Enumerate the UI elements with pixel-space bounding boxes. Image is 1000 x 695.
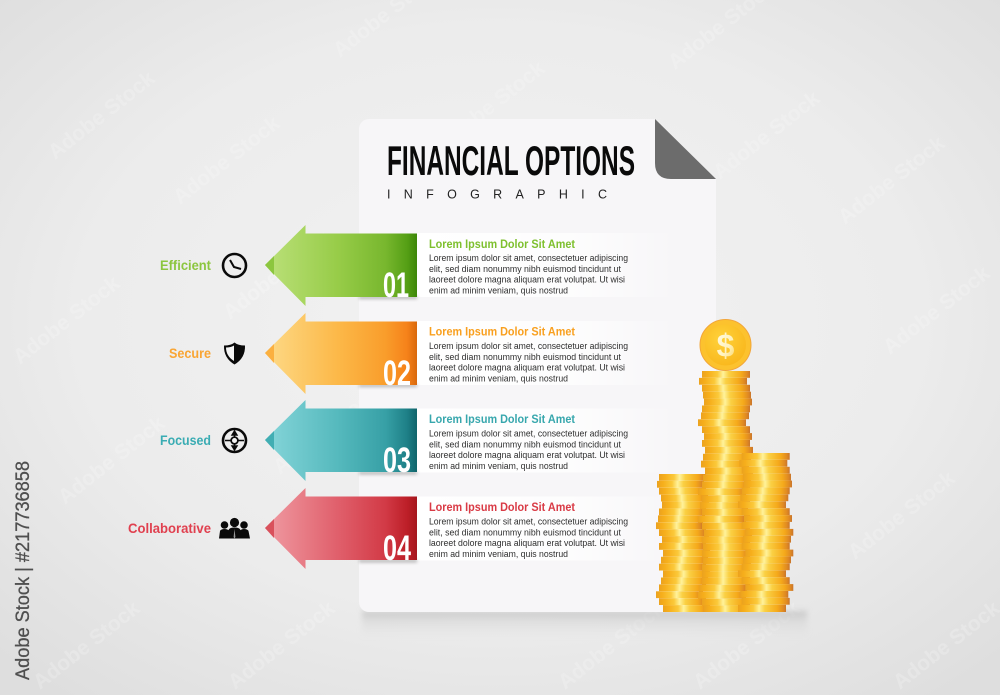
right coin stack <box>738 453 793 612</box>
body text: elit, sed diam nonummy nibh euismod tincidunt ut <box>429 440 621 450</box>
body text: enim ad minim veniam, quis nostrud <box>429 374 568 384</box>
arrow shadow <box>359 560 417 562</box>
watermark pattern: Adobe Stock <box>29 597 144 694</box>
heading: Lorem Ipsum Dolor Sit Amet <box>429 237 575 251</box>
watermark pattern: Adobe Stock <box>834 132 949 229</box>
body text: Lorem ipsum dolor sit amet, consectetuer adipiscing <box>429 428 628 440</box>
arrow <box>265 488 417 569</box>
arrow tip <box>265 519 274 538</box>
number: 02 <box>383 354 411 393</box>
watermark pattern: Adobe Stock <box>169 112 284 209</box>
label: Secure <box>169 346 211 361</box>
body text: laoreet dolore magna aliquam erat volutpat. Ut wisi <box>429 538 625 549</box>
arrow <box>265 400 417 481</box>
row 4: collaborative <box>128 488 677 569</box>
watermark pattern: Adobe Stock <box>434 57 549 154</box>
watermark pattern: Adobe Stock <box>54 412 169 509</box>
middle coin stack <box>698 371 753 612</box>
text band <box>417 408 677 472</box>
body text <box>429 428 628 472</box>
label: Focused <box>160 433 211 448</box>
subtitle: INFOGRAPHIC <box>387 188 607 202</box>
title: FINANCIAL OPTIONS <box>387 137 635 184</box>
body text <box>429 516 628 560</box>
icon: compass <box>223 429 246 452</box>
heading: Lorem Ipsum Dolor Sit Amet <box>429 500 575 514</box>
row 2: secure <box>169 313 677 394</box>
watermark pattern: Adobe Stock <box>709 87 824 184</box>
icon: shield <box>224 342 245 364</box>
text band <box>417 233 677 297</box>
arrow tip <box>265 431 274 450</box>
body text: elit, sed diam nonummy nibh euismod tincidunt ut <box>429 264 621 275</box>
number: 03 <box>383 441 411 480</box>
watermark pattern: Adobe Stock <box>844 467 959 564</box>
body text: Lorem ipsum dolor sit amet, consectetuer adipiscing <box>429 341 628 352</box>
arrow tip <box>265 256 274 275</box>
row 3: focused <box>160 400 677 481</box>
stock id side text: Adobe Stock | #217736858 <box>13 461 34 680</box>
icon: people <box>219 518 250 538</box>
left coin stack <box>656 474 710 612</box>
watermark pattern: Adobe Stock <box>879 262 994 359</box>
watermark pattern: Adobe Stock <box>224 597 339 694</box>
arrow tip <box>265 344 274 363</box>
body text: Lorem ipsum dolor sit amet, consectetuer adipiscing <box>429 516 628 528</box>
arrow <box>265 313 417 394</box>
label: Collaborative <box>128 521 211 536</box>
body text: laoreet dolore magna aliquam erat volutpat. Ut wisi <box>429 450 625 461</box>
arrow <box>265 225 417 306</box>
body text <box>429 253 628 296</box>
watermark pattern: Adobe Stock <box>269 382 384 479</box>
body text: Lorem ipsum dolor sit amet, consectetuer adipiscing <box>429 253 628 264</box>
watermark pattern: Adobe Stock <box>44 67 159 164</box>
icon: dollar coin: $ <box>717 328 735 364</box>
icon: folded corner <box>655 119 716 179</box>
number: 01 <box>383 266 409 305</box>
watermark pattern: Adobe Stock <box>534 232 649 329</box>
heading: Lorem Ipsum Dolor Sit Amet <box>429 324 575 338</box>
text band <box>417 496 677 560</box>
watermark pattern: Adobe Stock <box>219 227 334 324</box>
text band <box>417 321 677 385</box>
body text: enim ad minim veniam, quis nostrud <box>429 286 568 296</box>
body text: laoreet dolore magna aliquam erat volutpat. Ut wisi <box>429 362 625 374</box>
arrow shadow <box>359 296 417 299</box>
coin stacks <box>656 371 793 612</box>
row 1: efficient <box>160 225 677 306</box>
watermark pattern: Adobe Stock <box>9 272 124 369</box>
arrow shadow <box>359 384 417 387</box>
body text: enim ad minim veniam, quis nostrud <box>429 549 568 560</box>
watermark pattern: Adobe Stock <box>689 597 804 694</box>
watermark pattern: Adobe Stock <box>554 597 669 694</box>
body text <box>429 341 628 384</box>
page shadow <box>362 611 807 637</box>
icon: clock <box>223 254 246 277</box>
arrow shadow <box>359 472 417 474</box>
body text: elit, sed diam nonummy nibh euismod tincidunt ut <box>429 528 621 538</box>
body text: elit, sed diam nonummy nibh euismod tincidunt ut <box>429 352 621 363</box>
number: 04 <box>383 529 411 568</box>
heading: Lorem Ipsum Dolor Sit Amet <box>429 412 575 426</box>
panel: document page <box>359 119 716 612</box>
body text: enim ad minim veniam, quis nostrud <box>429 461 568 472</box>
body text: laoreet dolore magna aliquam erat volutpat. Ut wisi <box>429 274 625 286</box>
label: Efficient <box>160 258 211 273</box>
icon: dollar coin <box>700 320 751 370</box>
